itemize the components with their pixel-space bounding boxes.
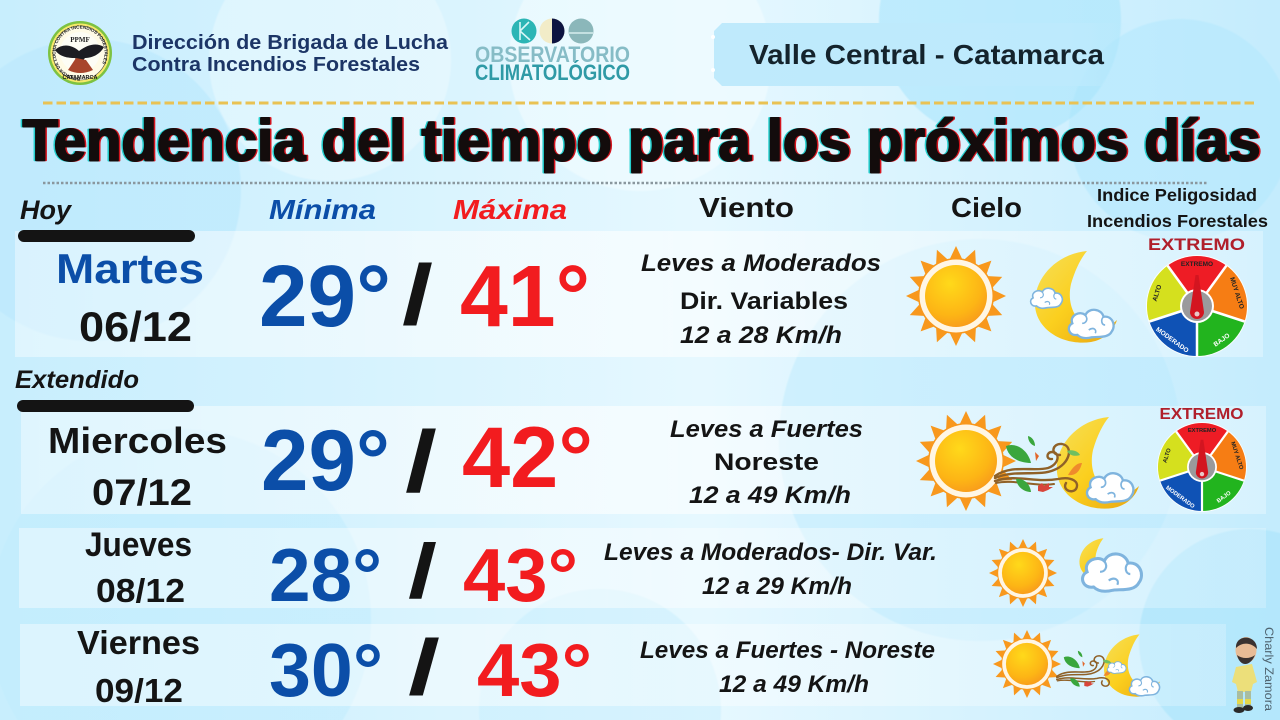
logo: observatorio climatológico: CLIMATOLÓGICO [475,60,630,85]
row: Miercoles: Miercoles [48,420,227,461]
row: Martes: 29° [259,248,391,345]
logo: brigada: CATAMARCA [63,75,97,81]
row: Miercoles: Leves a Fuertes [670,416,863,443]
row: Viernes: 30° [269,628,383,712]
row: Jueves: 08/12 [96,572,185,609]
logo: brigada: BRIGADA DE LUCHA CONTRA INCENDIOS FORESTALES [52,25,108,81]
column headings: Indice Peligosidad [1097,185,1257,205]
credit: Charly Zamora: Charly Zamora [1262,627,1276,711]
row: Jueves: 28° [269,533,382,617]
row: Viernes: Viernes [77,624,200,661]
gauge: Martes, extremo: EXTREMO [1181,261,1213,268]
gauge: Miercoles, extremo: MODERADO [1164,485,1196,510]
icon: sun, wind and moon, Viernes [993,630,1160,698]
icon: sun, Jueves [989,539,1057,607]
column headings: Viento [699,192,794,223]
row: Miercoles: 12 a 49 Km/h [689,482,851,509]
row: Jueves: Leves a Moderados- Dir. Var. [604,539,937,566]
row: Jueves: Jueves [85,526,192,564]
row: Miercoles: 29° [261,413,390,509]
column headings: Cielo [951,192,1022,223]
icon: sun, wind and moon, Miercoles [916,411,1139,511]
header: organization name: Contra Incendios Forestales [132,53,420,76]
row: Martes: 12 a 28 Km/h [680,322,842,349]
title: Tendencia del tiempo para los próximos días [24,108,1262,174]
row: Miercoles: Noreste [714,449,819,476]
row: Martes: Martes [56,245,204,292]
column headings: Incendios Forestales [1087,211,1268,231]
icon: moon behind cloud, Jueves [1079,538,1142,591]
gauge: Miercoles, extremo: MUY ALTO [1229,441,1244,471]
gauge: Miercoles, extremo [1157,406,1247,512]
row: Miercoles: / [405,414,437,510]
gauge: Martes, extremo: MUY ALTO [1228,276,1245,310]
icon: sun, Martes [906,246,1006,346]
logo: observatorio climatológico [475,18,630,85]
gauge: Martes, extremo: MODERADO [1154,326,1190,355]
row: Viernes [77,623,935,712]
header: organization name [132,31,449,76]
row: Miercoles: 07/12 [92,472,192,513]
logo: brigada: PPMF [70,36,90,44]
gauge: Martes, extremo [1146,235,1248,357]
section label: extendido: Extendido [15,366,139,394]
row: Jueves: / [408,529,437,614]
column headings: Mínima [269,194,376,225]
header: organization name: Dirección de Brigada de Lucha [132,31,449,54]
column headings: Máxima [453,194,567,225]
row: Viernes: 43° [477,628,592,712]
row: Jueves: 12 a 29 Km/h [702,573,852,600]
column headings [20,185,1268,231]
row: Viernes: 09/12 [95,672,183,709]
location label: Valle Central - Catamarca [749,39,1104,70]
column headings: Hoy [20,195,73,225]
title: Tendencia del tiempo para los próximos días [22,108,1260,174]
location label [711,23,1130,86]
row: Martes: 06/12 [79,303,192,350]
panel: row backgrounds [15,231,1266,706]
row: Martes: Dir. Variables [680,288,848,315]
row: Viernes: 12 a 49 Km/h [719,671,869,698]
row: Martes: / [402,248,433,342]
illustration: author character [1232,637,1257,713]
row: Viernes: / [408,623,440,711]
row: Martes: 41° [460,248,590,345]
row: Jueves [85,526,937,617]
gauge: Martes, extremo: BAJO [1213,332,1231,349]
gauge: Miercoles, extremo: EXTREMO [1188,428,1217,434]
gauge: Miercoles, extremo: BAJO [1216,490,1233,505]
row: Viernes: Leves a Fuertes - Noreste [640,637,935,664]
gauge: Miercoles, extremo: EXTREMO [1160,406,1244,423]
row: Jueves: 43° [463,533,578,617]
row: Martes: Leves a Moderados [641,250,881,277]
row: Miercoles [48,410,863,513]
gauge: Miercoles, extremo: ALTO [1162,447,1173,464]
row: Miercoles: 42° [462,410,593,506]
gauge: Martes, extremo: ALTO [1152,284,1164,302]
icon: moon with clouds, Martes [1031,251,1117,343]
gauge: Martes, extremo: EXTREMO [1148,235,1245,254]
title: Tendencia del tiempo para los próximos días [21,108,1259,174]
logo: observatorio climatológico: OBSERVATORIO [475,42,630,67]
row: Martes [56,245,881,350]
